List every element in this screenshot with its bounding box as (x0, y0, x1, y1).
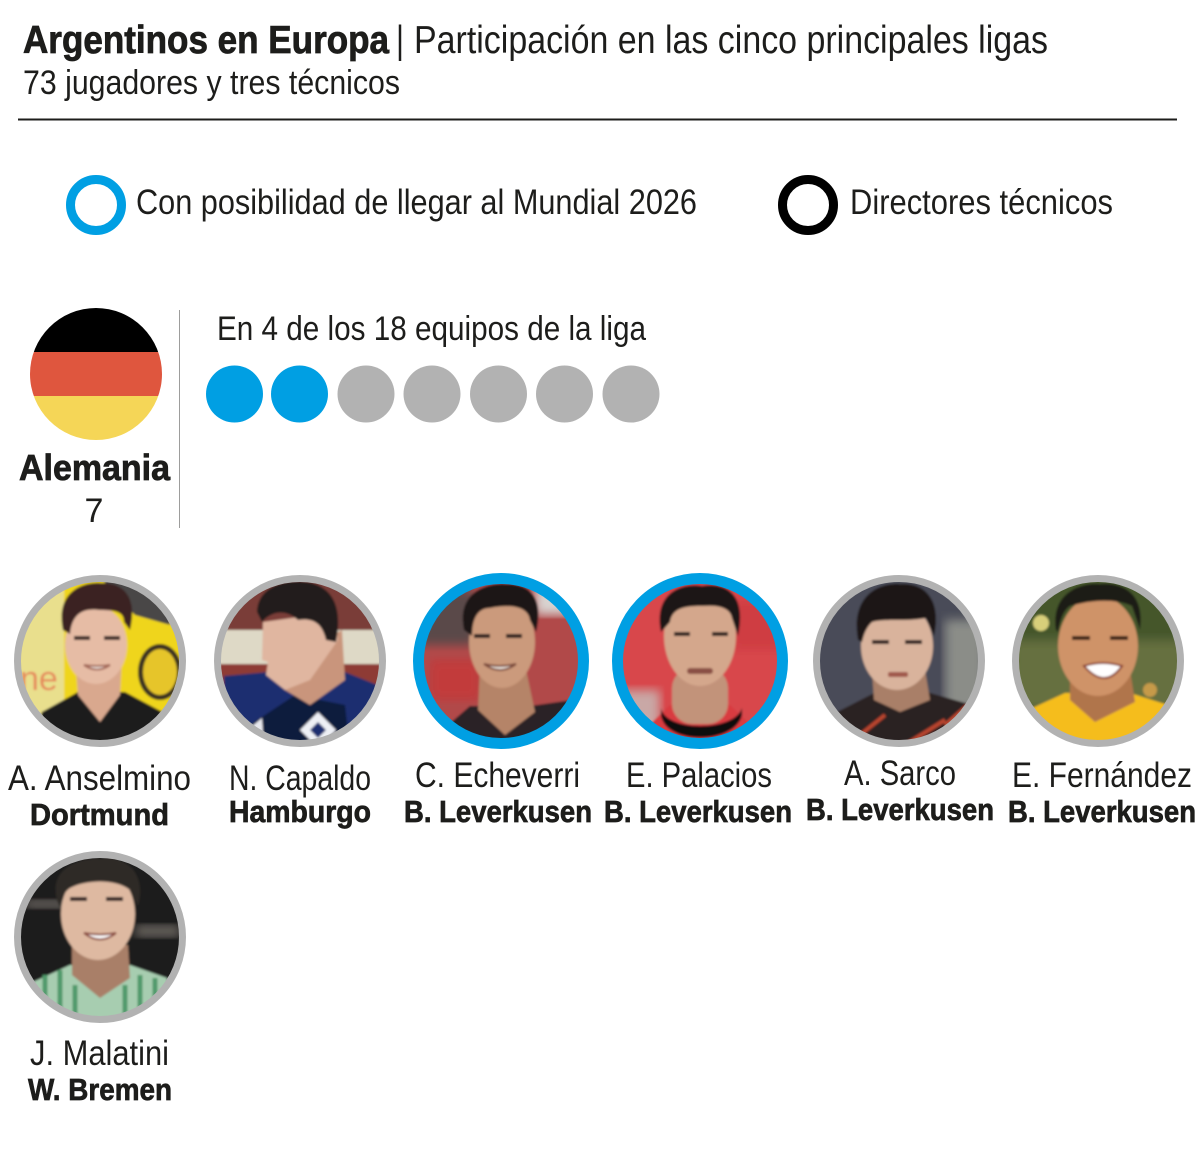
player: N. Capaldo (214, 575, 386, 829)
player count dots (206, 366, 660, 422)
name: E. Palacios (626, 756, 772, 795)
name: A. Sarco (844, 754, 956, 793)
player: E. Palacios (604, 575, 792, 829)
country name: Alemania (19, 447, 171, 488)
title: Participación en las cinco principales ligas (414, 19, 1048, 62)
icon: Germany flag (30, 308, 162, 440)
name: A. Anselmino (8, 759, 191, 798)
title (23, 19, 1048, 62)
title: | (396, 19, 404, 62)
name: C. Echeverri (415, 756, 580, 795)
team: B. Leverkusen (604, 794, 792, 829)
country count: 7 (85, 492, 103, 530)
subtitle: 73 jugadores y tres técnicos (23, 64, 400, 102)
team: Hamburgo (229, 794, 371, 829)
player: C. Echeverri (404, 575, 592, 829)
player: A. Anselmino: ne (20, 660, 58, 698)
team: Dortmund (30, 797, 169, 832)
name: J. Malatini (30, 1034, 169, 1073)
team: B. Leverkusen (806, 792, 994, 827)
legend: coaches (782, 180, 1113, 230)
league share text: En 4 de los 18 equipos de la liga (217, 310, 646, 348)
team: W. Bremen (28, 1072, 172, 1107)
legend: coaches: Directores técnicos (850, 183, 1113, 222)
legend: possible World Cup players (70, 180, 697, 230)
player: E. Fernández (1008, 575, 1196, 829)
player: A. Sarco (806, 575, 994, 827)
team: B. Leverkusen (404, 794, 592, 829)
player: A. Anselmino (8, 575, 191, 832)
name: N. Capaldo (229, 759, 371, 798)
legend: possible World Cup players: Con posibilidad de llegar al Mundial 2026 (136, 183, 697, 222)
player: J. Malatini (14, 851, 186, 1107)
title: Argentinos en Europa (23, 19, 389, 62)
